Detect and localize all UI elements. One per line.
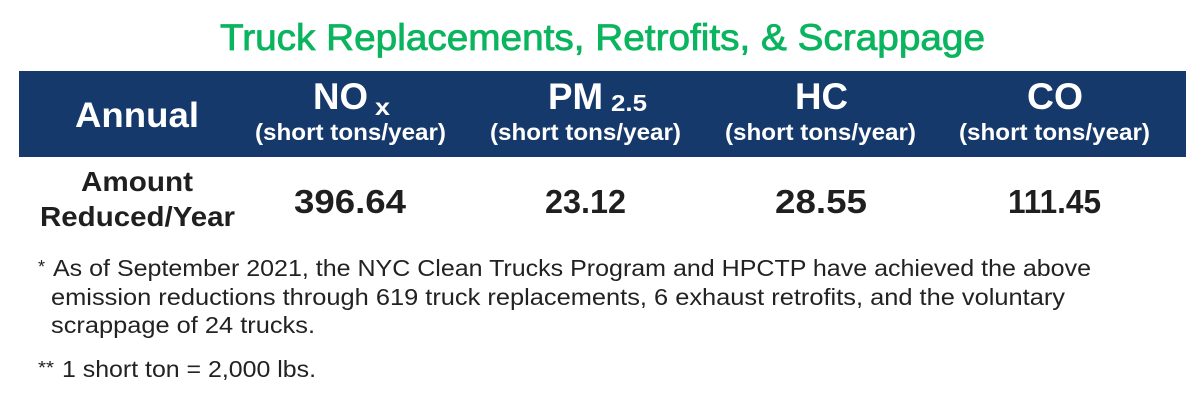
header: HC [725,76,916,145]
header: HC: (short tons/year) [725,119,916,145]
footnote: program achievements [38,255,1091,338]
header: CO: CO [1027,76,1083,117]
table header band [19,71,1186,157]
header: HC: HC [795,76,848,117]
header: NOx [255,76,446,145]
header: PM2.5: (short tons/year) [490,119,681,145]
footnote: program achievements: As of September 2021, the NYC Clean Trucks Program and HPCTP have achieved the above [53,255,1091,281]
footnote: program achievements: * [38,257,45,277]
footnote: program achievements: scrappage of 24 trucks. [51,312,315,338]
value: NOx: 396.64 [294,183,407,220]
row label: Amount Reduced/Year [40,166,235,232]
header: NOx: (short tons/year) [255,119,446,145]
header: PM2.5: PM [548,76,603,117]
row label: Amount Reduced/Year: Amount [81,166,193,197]
header: NOx: x [375,94,390,120]
footnote: program achievements: emission reductions through 619 truck replacements, 6 exhaust retrofits, and the voluntary [51,284,1066,310]
value: CO: 111.45 [1008,183,1101,220]
header: CO [959,76,1150,145]
footnote: short ton definition: 1 short ton = 2,000 lbs. [62,356,316,382]
title: Truck Replacements, Retrofits, & Scrappage [220,17,985,58]
value: PM2.5: 23.12 [545,183,626,220]
row label: Amount Reduced/Year: Reduced/Year [40,201,235,232]
header: NOx: NO [313,76,368,117]
header: PM2.5 [490,76,681,145]
value: HC: 28.55 [775,183,867,220]
header: PM2.5: 2.5 [611,90,647,116]
header: Annual: Annual [75,96,199,135]
footnote: short ton definition: ** [38,358,54,378]
header: CO: (short tons/year) [959,119,1150,145]
